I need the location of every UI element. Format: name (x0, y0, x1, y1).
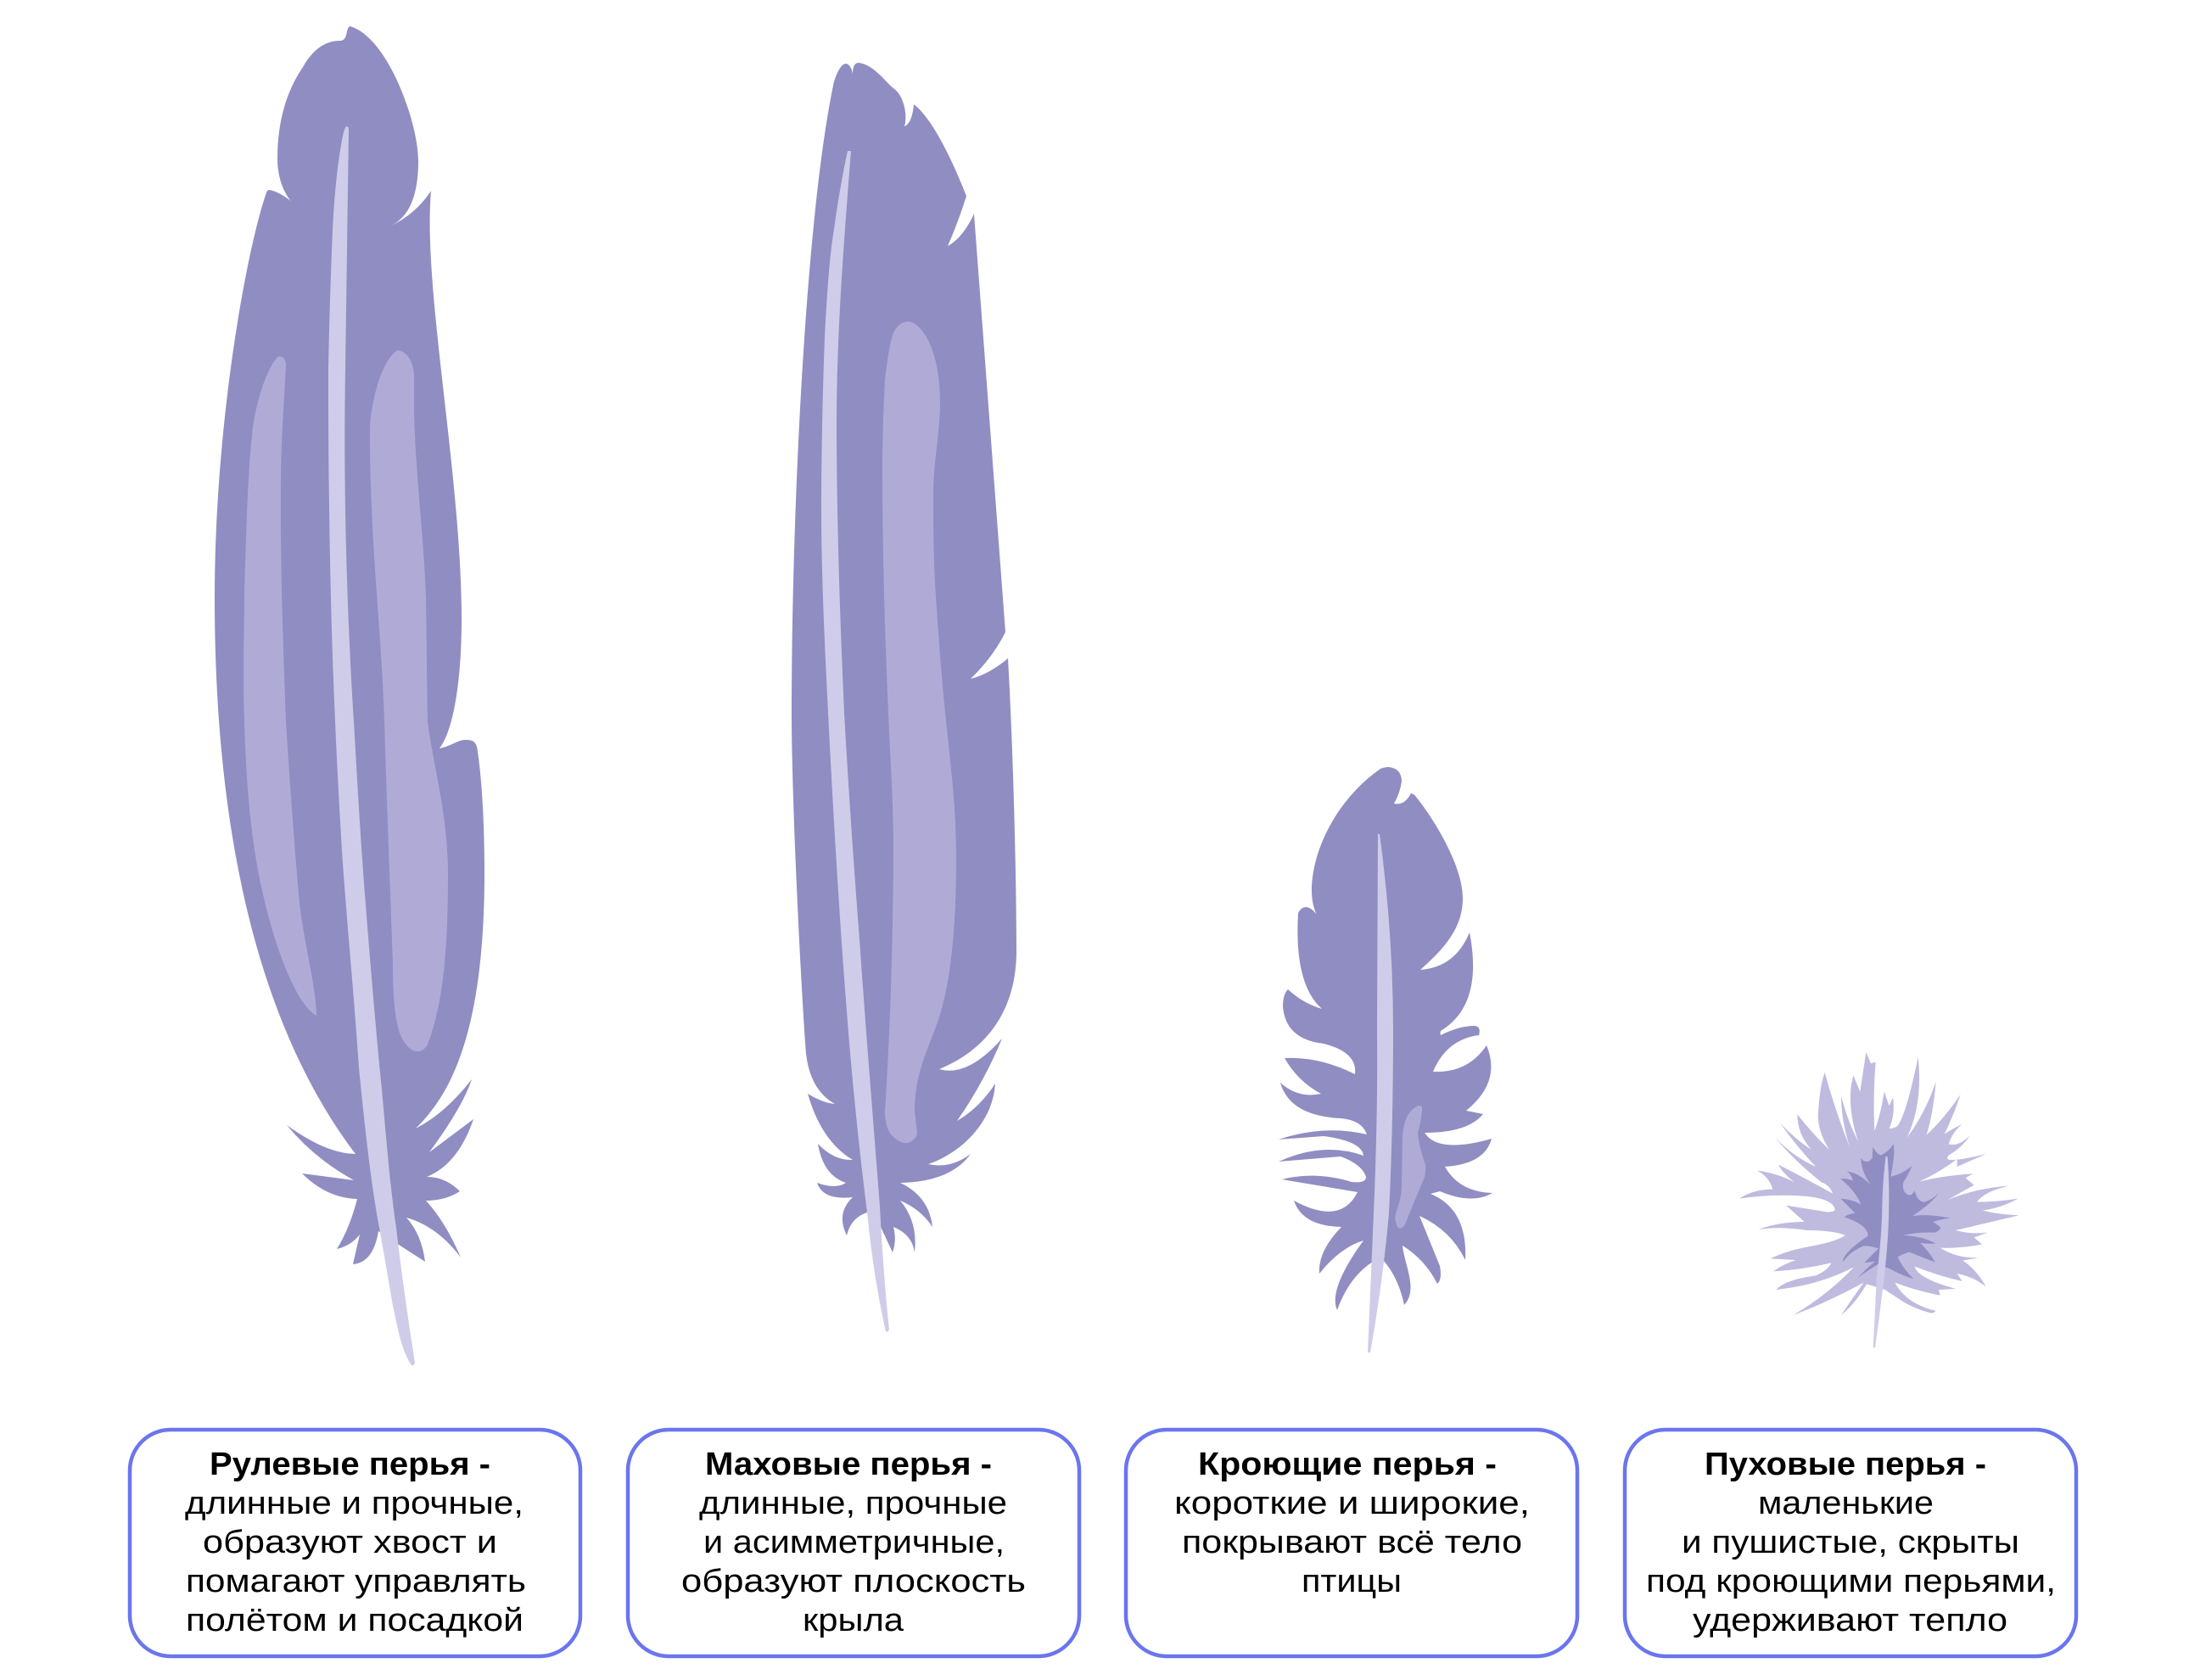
heading: Рулевые перья - (210, 1447, 490, 1482)
heading: Кроющие перья - (1198, 1447, 1497, 1482)
description: и асимметричные, (703, 1525, 1005, 1560)
quill (328, 126, 415, 1366)
description (1174, 1486, 1530, 1599)
description (681, 1486, 1026, 1638)
description (1646, 1486, 2056, 1638)
vane highlight (1395, 1106, 1425, 1229)
description: покрывают всё тело (1182, 1525, 1522, 1560)
right vane highlight (370, 350, 448, 1051)
card: flight feathers (628, 1430, 1079, 1656)
card: covert feathers (1126, 1430, 1577, 1656)
feather: covert feather (1279, 767, 1492, 1352)
description (185, 1486, 526, 1638)
heading: Пуховые перья - (1705, 1447, 1986, 1482)
feather: down feather (1739, 1052, 2018, 1347)
description: удерживают тепло (1693, 1603, 2007, 1638)
quill (821, 151, 889, 1332)
description: образуют плоскость (681, 1564, 1026, 1599)
heading: Маховые перья - (705, 1447, 992, 1482)
quill (1368, 834, 1393, 1352)
dark centre (1840, 1144, 1951, 1279)
description: короткие и широкие, (1174, 1486, 1530, 1521)
description: маленькие (1758, 1486, 1934, 1521)
left vane highlight (244, 356, 316, 1016)
description: под кроющими перьями, (1646, 1564, 2056, 1599)
description: крыла (803, 1603, 904, 1638)
quill (1873, 1156, 1889, 1347)
description: длинные, прочные (699, 1486, 1007, 1521)
description: помагают управлять (186, 1564, 526, 1599)
vane highlight (882, 322, 956, 1143)
feather: tail feather (215, 26, 484, 1366)
description: и пушистые, скрыты (1682, 1525, 2019, 1560)
card: tail feathers (130, 1430, 580, 1656)
description: птицы (1302, 1564, 1402, 1599)
card: down feathers (1625, 1430, 2076, 1656)
description: образуют хвост и (203, 1525, 497, 1560)
description: длинные и прочные, (185, 1486, 524, 1521)
feather: flight feather (792, 63, 1016, 1332)
description: полётом и посадкой (186, 1603, 524, 1638)
